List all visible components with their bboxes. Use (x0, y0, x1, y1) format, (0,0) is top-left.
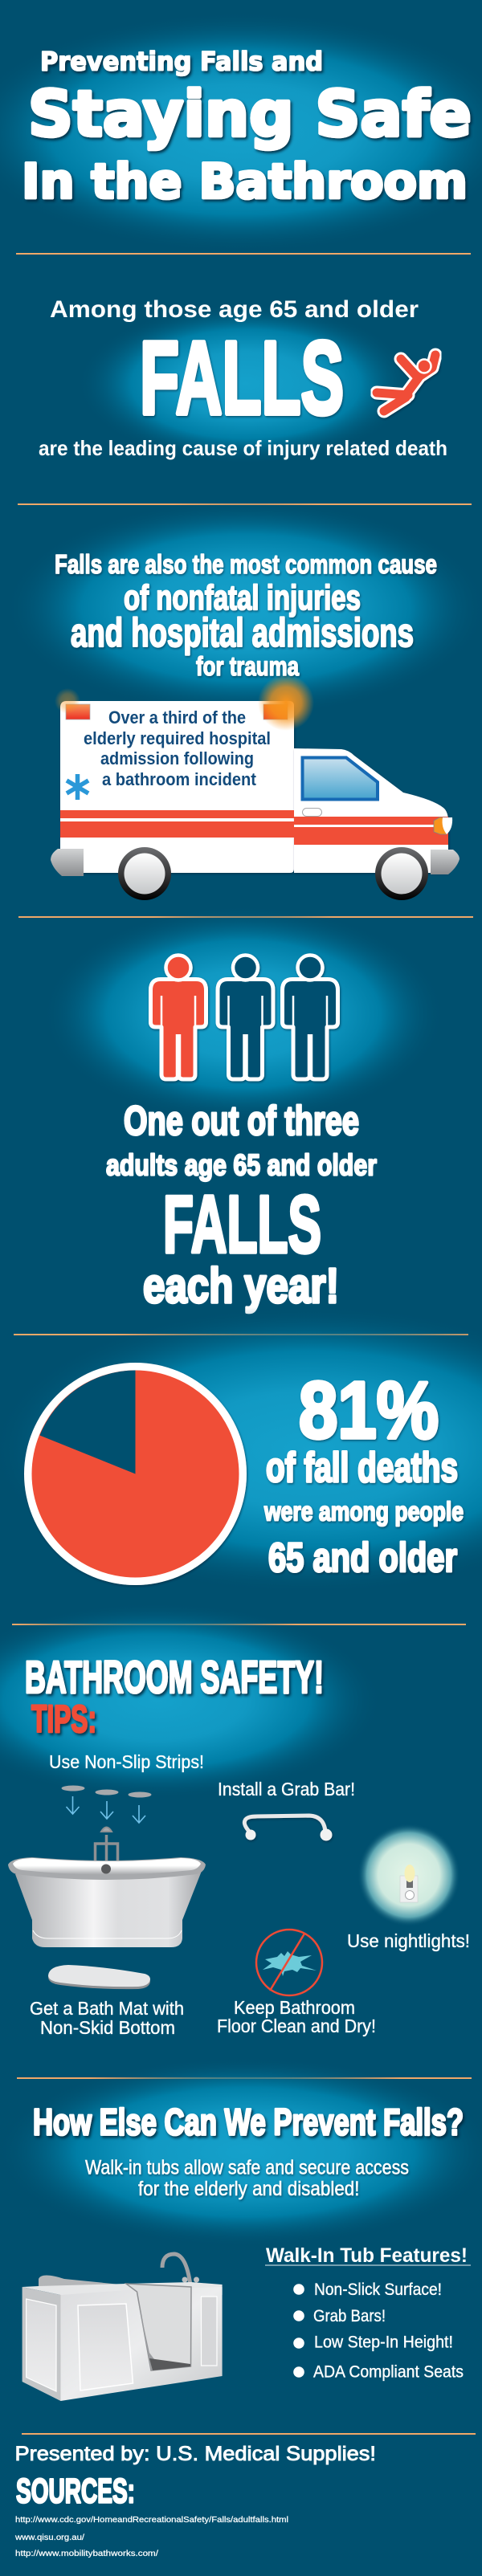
list: features: Grab Bars! (313, 2307, 386, 2325)
star of life (67, 774, 88, 800)
stripes (60, 810, 448, 845)
light glow right (258, 675, 314, 731)
ambulance text (84, 707, 271, 789)
title line: Preventing Falls and: Preventing Falls and (40, 47, 323, 77)
icon: nightlight (357, 1824, 460, 1926)
text: 81%: 81% (299, 1365, 439, 1455)
rear wheel (118, 847, 171, 900)
ambulance text: Over a third of the (108, 707, 246, 728)
heading: features: Walk-In Tub Features! (266, 2244, 468, 2267)
text: leading cause: are the leading cause of injury related death (39, 436, 447, 460)
text: for trauma: for trauma (196, 651, 300, 681)
text: keep floor dry (217, 1997, 376, 2036)
right warning light (263, 704, 288, 719)
icon: blue person (218, 956, 273, 1079)
panel: how else can we prevent falls (0, 2057, 482, 2401)
text: bath mat (30, 1998, 184, 2038)
illustration: bathtub (8, 1828, 206, 1947)
tub right panel (201, 2297, 217, 2366)
list: source urls: http://www.cdc.gov/HomeandRecreationalSafety/Falls/adultfalls.html (15, 2515, 288, 2525)
front wheel (375, 847, 428, 900)
icon: red person (151, 956, 206, 1079)
icon: bath mat (48, 1965, 150, 1989)
light glow left (55, 688, 80, 714)
title line: Staying Safe: Staying Safe (28, 79, 472, 151)
text: walk-in tubs: for the elderly and disabled! (138, 2178, 360, 2200)
icon: falling person (377, 355, 435, 411)
panel: bathroom safety tips (0, 1603, 470, 2038)
text: walk-in tubs: Walk-in tubs allow safe and secure access (85, 2157, 409, 2179)
panel: nonfatal injuries (5, 499, 482, 716)
panel: leading cause of death (39, 296, 447, 464)
faucet (95, 1828, 117, 1863)
window (302, 758, 378, 800)
ambulance text: elderly required hospital (84, 728, 271, 748)
rear bumper (51, 849, 84, 876)
tub door panel (78, 2304, 133, 2391)
heading: sources: SOURCES: (16, 2472, 135, 2510)
text: each year: each year! (143, 1258, 339, 1313)
tub front (61, 2287, 223, 2401)
icon: no water on floor (256, 1930, 322, 1995)
pie chart (24, 1363, 247, 1585)
ambulance box (60, 701, 294, 873)
title line: In the Bathroom: In the Bathroom (22, 154, 468, 210)
list: source urls (14, 2515, 288, 2558)
ambulance cab (294, 748, 448, 873)
list: features: ADA Compliant Seats (313, 2362, 464, 2382)
text: bath mat: Get a Bath Mat with (30, 1998, 184, 2019)
list: features: Non-Slick Surface! (314, 2280, 442, 2299)
text: keep floor dry: Floor Clean and Dry! (217, 2016, 376, 2036)
text: FALLS: FALLS (140, 320, 344, 436)
list: features: Low Step-In Height! (314, 2333, 453, 2351)
text: nonfatal injuries: of nonfatal injuries (124, 578, 361, 618)
icon: grab bar (244, 1816, 333, 1840)
heading: tips: TIPS: (31, 1698, 96, 1741)
ambulance text: a bathroom incident (102, 769, 257, 789)
text: walk-in tubs (85, 2157, 409, 2200)
footer (14, 2443, 376, 2558)
icon: strips with arrows (61, 1786, 151, 1823)
icon: blue person two (283, 956, 337, 1079)
text: keep floor dry: Keep Bathroom (234, 1997, 355, 2018)
text: presented by: Presented by: U.S. Medical Supplies! (14, 2443, 376, 2465)
front bumper (431, 850, 460, 874)
tub left side (22, 2287, 61, 2401)
tub rear basin (39, 2276, 129, 2295)
tub rim (8, 1857, 206, 1880)
tub door opening (126, 2284, 191, 2370)
left warning light (66, 704, 90, 719)
list: features (293, 2280, 464, 2382)
text: nightlights: Use nightlights! (347, 1930, 470, 1951)
list: source urls: http://www.mobilitybathworks.com/ (15, 2549, 158, 2558)
door handle (302, 808, 321, 816)
panel: 81 percent (0, 1305, 482, 1594)
text: among those age 65: Among those age 65 and older (50, 296, 419, 323)
tub body (15, 1871, 202, 1947)
tub top (22, 2282, 223, 2295)
text: grab bar: Install a Grab Bar! (218, 1779, 355, 1800)
panel: title (0, 12, 482, 253)
text: bath mat: Non-Skid Bottom (40, 2017, 175, 2038)
drain (101, 1865, 111, 1874)
tub left panel (27, 2299, 56, 2391)
panel: one out of three (43, 906, 444, 1313)
headlight (434, 817, 452, 834)
tub faucet (162, 2254, 190, 2285)
text: adults age 65: adults age 65 and older (106, 1148, 377, 1182)
illustration: walk-in tub (22, 2254, 223, 2401)
text: FALLS: FALLS (163, 1180, 321, 1270)
text: one out of three: One out of three (124, 1098, 359, 1143)
list: source urls: www.qisu.org.au/ (14, 2533, 84, 2542)
text: non-slip strips: Use Non-Slip Strips! (49, 1751, 204, 1772)
ambulance text: admission following (100, 748, 254, 768)
illustration: ambulance (51, 675, 460, 900)
